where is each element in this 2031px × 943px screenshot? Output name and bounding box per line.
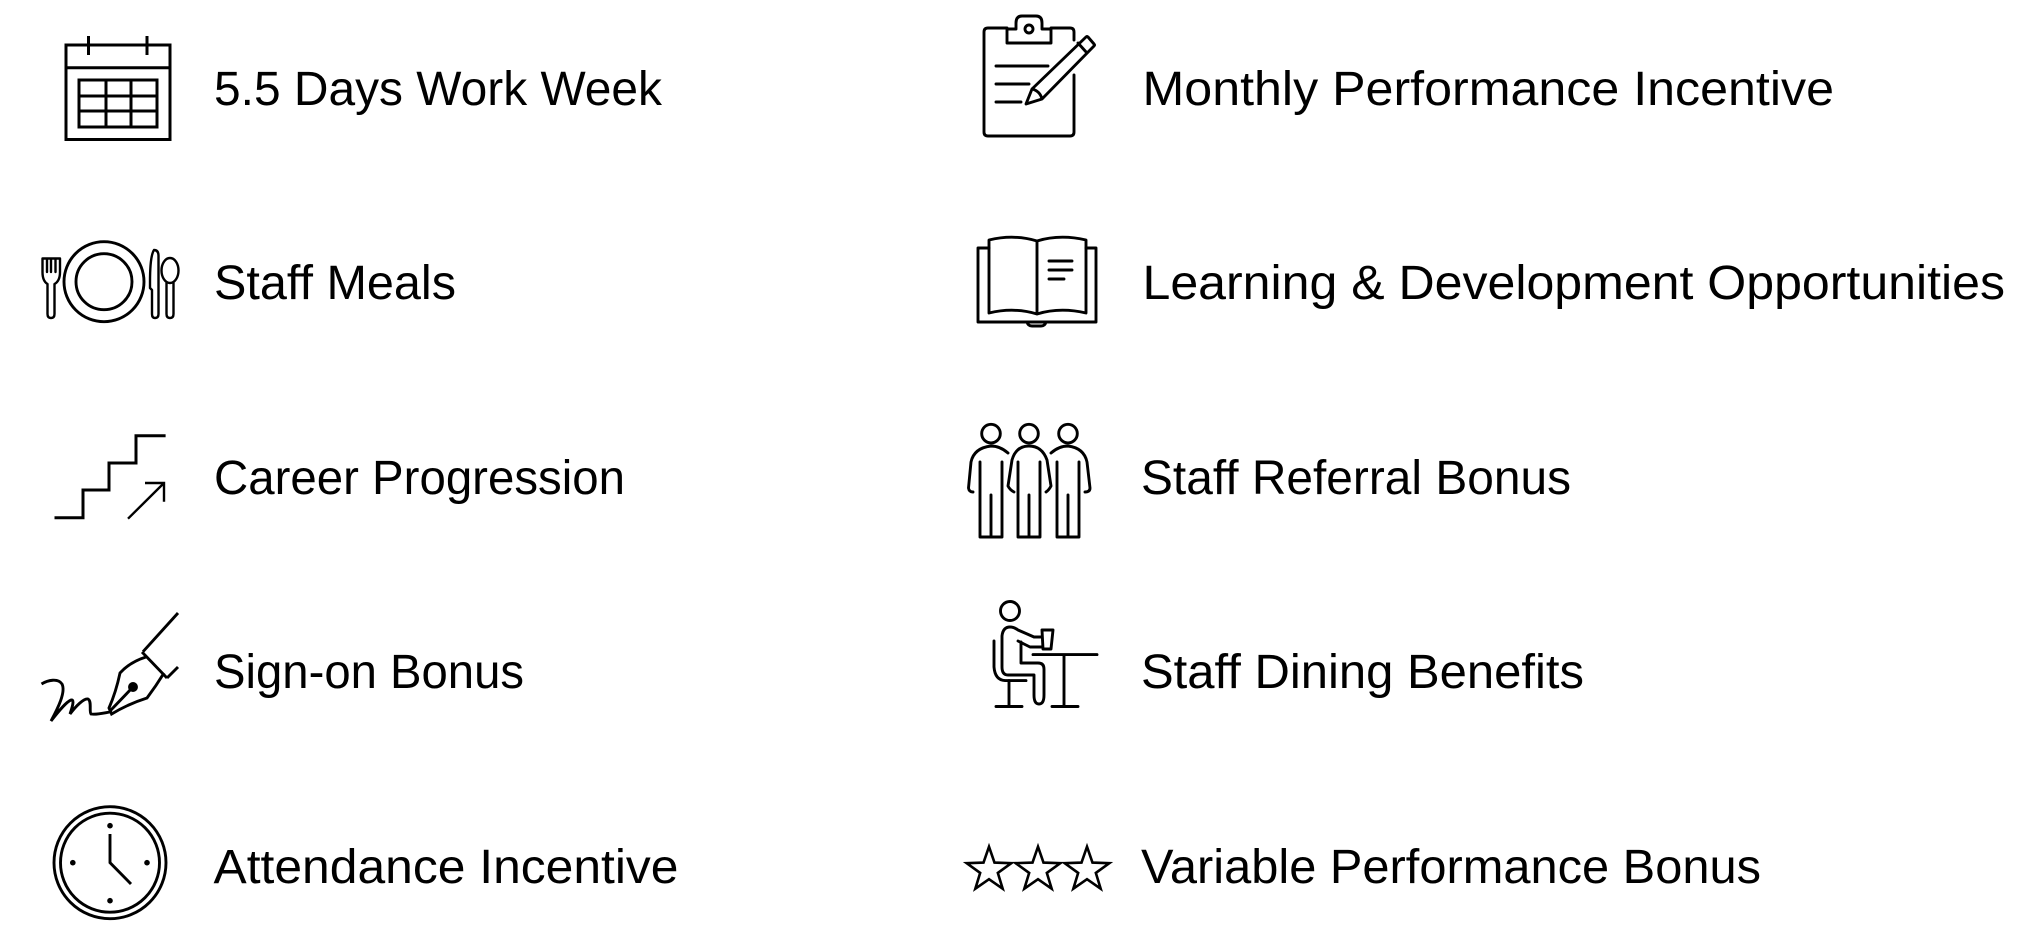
text: Monthly Performance Incentive: Monthly Performance Incentive [1142,63,1834,116]
text: Variable Performance Bonus: Variable Performance Bonus [1141,841,1761,894]
icon: calendar [66,36,170,140]
icon: plate and cutlery [42,242,178,322]
icon: three stars [967,847,1109,889]
text: 5.5 Days Work Week: 5.5 Days Work Week [214,63,663,116]
text: Attendance Incentive: Attendance Incentive [214,841,678,894]
text: Staff Meals: Staff Meals [214,257,456,310]
text: Learning & Development Opportunities: Learning & Development Opportunities [1142,257,2005,310]
icon: clipboard with pencil [984,16,1094,136]
icon: three people [968,424,1090,537]
text: Career Progression: Career Progression [214,452,625,505]
text: Staff Dining Benefits: Staff Dining Benefits [1141,646,1584,699]
icon: stairs with arrow [54,436,166,519]
text: Sign-on Bonus: Sign-on Bonus [214,646,524,699]
text: Staff Referral Bonus: Staff Referral Bonus [1141,452,1571,505]
icon: clock [54,807,166,919]
icon: person at dining table [994,602,1097,706]
icon: open book [978,237,1096,326]
icon: fountain pen signature [42,613,178,721]
